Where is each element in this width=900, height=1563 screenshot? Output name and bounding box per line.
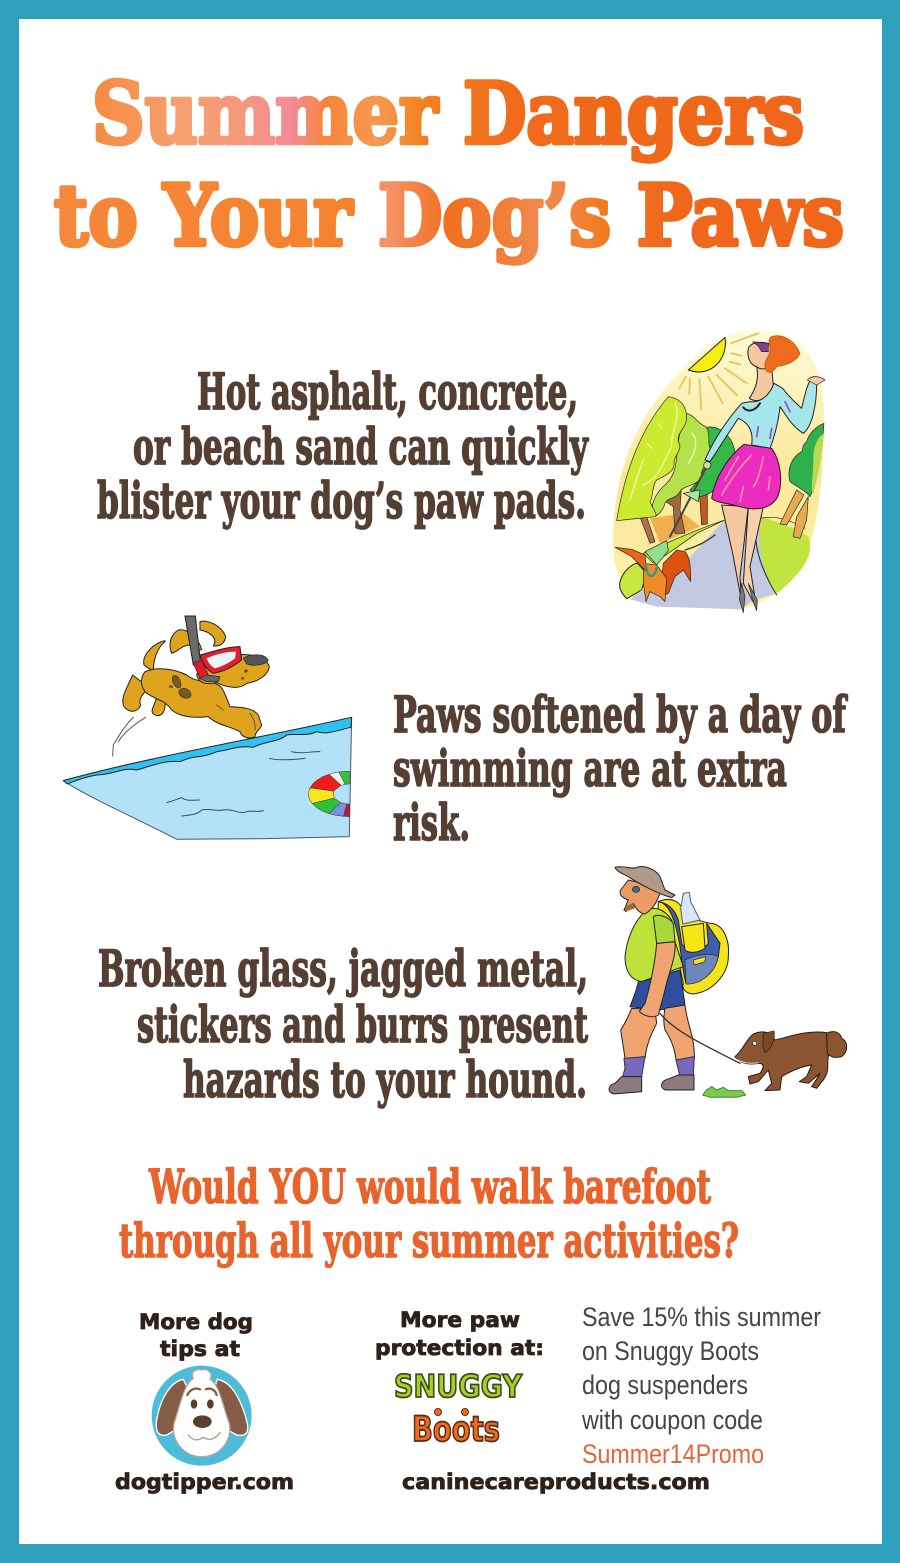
top — [705, 377, 817, 462]
dog tail — [685, 535, 715, 550]
footer: dogtipper url: dogtipper.com — [115, 1470, 294, 1494]
sun rays — [679, 333, 758, 409]
coupon text block: on Snuggy Boots — [582, 1336, 759, 1366]
legs — [621, 1008, 657, 1058]
leash — [660, 1013, 740, 1063]
coat — [645, 541, 668, 565]
coupon text block: with coupon code — [581, 1405, 763, 1435]
text block: sharp hazards: stickers and burrs present — [137, 995, 588, 1054]
logo: Snuggy Boots: SNUGGY — [394, 1369, 522, 1405]
footer: dog tips heading — [139, 1310, 253, 1361]
grass band behind dog — [643, 520, 725, 563]
icon: dogtipper logo — [152, 1366, 252, 1466]
dachshund head — [615, 547, 647, 572]
logo: Snuggy Boots: Boots — [412, 1410, 500, 1450]
head — [620, 880, 662, 914]
illustration: hiker walking brown dog — [609, 867, 847, 1097]
head — [748, 342, 773, 369]
text block: sharp hazards: Broken glass, jagged metal, — [98, 939, 588, 998]
tree highlights — [630, 403, 696, 500]
footer: dog tips heading: tips at — [160, 1337, 240, 1361]
text block: softened paws — [393, 685, 848, 852]
dog head — [197, 655, 269, 687]
socks — [623, 1057, 645, 1077]
coupon text block: Summer14Promo — [582, 1439, 764, 1469]
pool water — [63, 717, 352, 839]
coupon text block: Save 15% this summer — [582, 1302, 821, 1332]
text block: hot surfaces: blister your dog’s paw pads. — [97, 471, 586, 530]
dog spots — [171, 674, 183, 689]
grass tuft — [703, 1087, 746, 1097]
text block: sharp hazards — [98, 939, 588, 1109]
dog ears — [170, 630, 202, 653]
ripples — [167, 752, 320, 816]
backpack — [657, 900, 729, 994]
small right tree — [780, 490, 808, 538]
neck — [749, 367, 773, 400]
green bow — [683, 490, 700, 502]
title: Summer Dangers — [92, 64, 804, 163]
pool edge band — [63, 717, 352, 784]
sky blob — [613, 330, 824, 610]
brown dog — [735, 1032, 830, 1091]
footer: canine care url: caninecareproducts.com — [402, 1470, 710, 1494]
coupon text block: dog suspenders — [582, 1370, 748, 1400]
boots — [609, 1077, 642, 1094]
dog tail — [144, 641, 165, 672]
hat — [615, 867, 675, 898]
dog nose — [243, 655, 268, 665]
lime bush — [620, 563, 647, 599]
footer: paw protection heading: protection at: — [375, 1336, 544, 1360]
footer: paw protection heading — [375, 1308, 544, 1360]
sun — [688, 337, 725, 372]
text block: hot surfaces — [97, 362, 589, 530]
dog body — [141, 669, 262, 738]
orange hair — [765, 336, 800, 372]
sunglasses — [753, 342, 768, 352]
dachshund front — [643, 563, 667, 602]
leash — [670, 465, 707, 537]
coupon text block — [581, 1302, 821, 1469]
back dark green tree — [690, 427, 735, 497]
snorkel tube — [185, 616, 201, 665]
call to action question — [119, 1160, 739, 1269]
collar — [646, 565, 657, 576]
logo: Snuggy Boots — [394, 1369, 522, 1450]
jump lines — [113, 717, 146, 756]
text block: hot surfaces: Hot asphalt, concrete, — [197, 362, 578, 421]
dog back legs — [123, 675, 150, 711]
tree trunks and ground — [615, 510, 723, 550]
text block: sharp hazards: hazards to your hound. — [183, 1050, 587, 1109]
legs — [722, 505, 748, 602]
dive mask — [200, 647, 242, 673]
dachshund body dark — [660, 550, 691, 597]
water bottle — [681, 892, 700, 924]
right hill — [759, 517, 810, 594]
hand — [807, 377, 825, 385]
mid tree — [652, 413, 712, 517]
road — [630, 517, 777, 609]
title — [54, 64, 844, 265]
footer: dog tips heading: More dog — [139, 1310, 253, 1334]
large tree — [617, 397, 686, 521]
shorts — [630, 970, 685, 1010]
beach ring — [308, 771, 349, 817]
arm — [639, 942, 675, 1017]
text block: softened paws: risk. — [393, 793, 470, 852]
text block: hot surfaces: or beach sand can quickly — [133, 417, 589, 476]
footer: paw protection heading: More paw — [400, 1308, 520, 1332]
illustration: woman walking dachshund in the sun — [613, 330, 825, 613]
shirt — [625, 908, 683, 982]
magenta skirt — [712, 444, 781, 509]
illustration: snorkel dog jumping into pool — [63, 616, 352, 839]
